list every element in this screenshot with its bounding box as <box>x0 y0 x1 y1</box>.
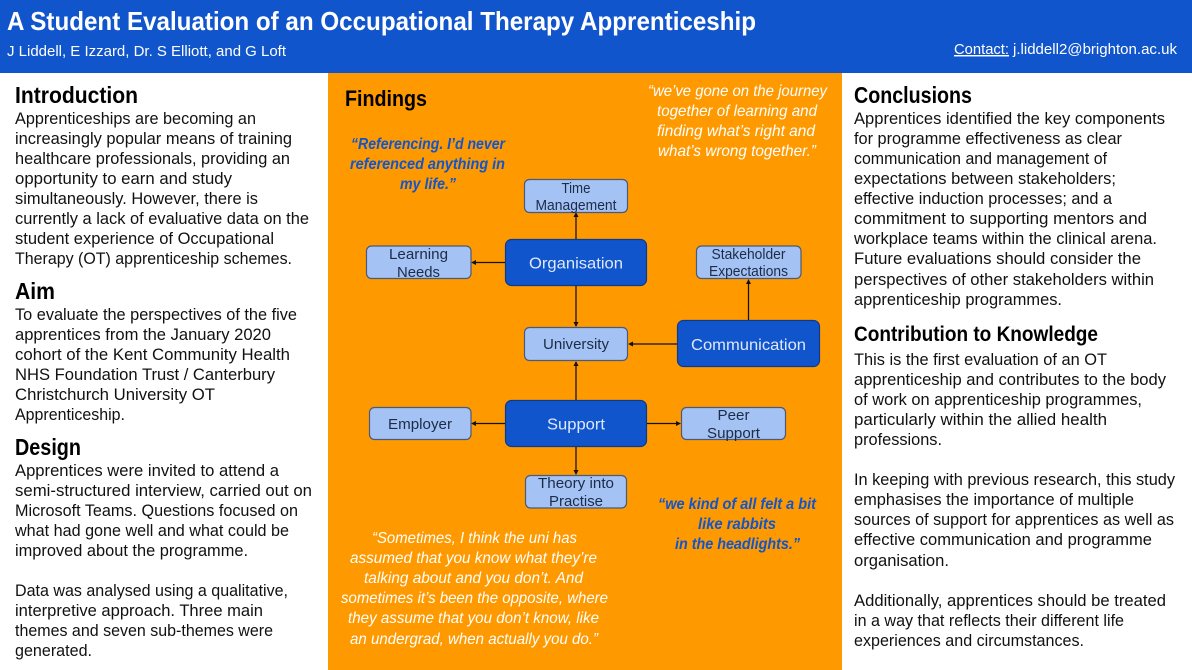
text: introduction: simultaneously. However, there is <box>15 190 258 208</box>
box: theory into practise: Theory into <box>538 476 614 492</box>
quote: rabbits: “we kind of all felt a bit <box>658 496 817 513</box>
text: conclusions: communication and management of <box>854 150 1107 168</box>
box: support: Support <box>547 416 606 434</box>
quote: sometimes: “Sometimes, I think the uni has <box>372 530 577 547</box>
text: introduction <box>15 110 309 268</box>
arrows <box>471 212 751 475</box>
text: contribution: In keeping with previous research, this study <box>854 471 1176 489</box>
text: aim: apprentices from the January 2020 <box>15 326 271 344</box>
quote: journey: finding what’s right and <box>657 123 816 140</box>
text: contribution: in a way that reflects their different life <box>854 612 1124 630</box>
quote: sometimes <box>341 530 608 648</box>
text: design: semi-structured interview, carried out on <box>15 482 312 500</box>
box: stakeholder expectations: Expectations <box>709 264 788 280</box>
quote: sometimes: assumed that you know what they’re <box>350 550 597 567</box>
text: contribution: emphasises the importance of multiple <box>854 491 1134 509</box>
panel: findings <box>341 83 828 648</box>
text: design: generated. <box>15 642 92 660</box>
box: time management: Management <box>536 198 616 214</box>
quote: referencing <box>350 136 506 193</box>
box: learning needs <box>366 246 471 281</box>
box: time management <box>524 180 628 214</box>
box: theory into practise <box>526 476 626 510</box>
text: conclusions: effective induction processes; and a <box>854 190 1113 208</box>
text: introduction: opportunity to earn and study <box>15 170 233 188</box>
text: conclusions: workplace teams within the clinical arena. <box>853 230 1157 248</box>
box: peer support <box>682 408 786 442</box>
text: aim: NHS Foundation Trust / Canterbury <box>15 366 276 384</box>
quote: sometimes: sometimes it’s been the opposite, where <box>341 590 608 607</box>
box: learning needs: Learning <box>389 247 448 263</box>
text: introduction: Therapy (OT) apprenticeship schemes. <box>15 250 292 268</box>
text: contribution: This is the first evaluation of an OT <box>854 351 1107 369</box>
heading: contribution to knowledge: Contribution to Knowledge <box>854 323 1098 346</box>
text: conclusions: perspectives of other stakeholders within <box>854 271 1154 289</box>
box: organisation <box>506 240 646 286</box>
text: contribution: apprenticeship and contributes to the body <box>854 371 1167 389</box>
text: design: Data was analysed using a qualitative, <box>15 582 288 600</box>
text: conclusions: apprenticeship programmes. <box>854 291 1062 309</box>
text: design: Apprentices were invited to attend a <box>15 462 280 480</box>
text: conclusions: for programme effectiveness as clear <box>854 130 1122 148</box>
quote: sometimes: an undergrad, when actually you do.” <box>350 631 599 648</box>
text: introduction: increasingly popular means of training <box>15 130 292 148</box>
quote: rabbits: in the headlights.” <box>675 536 800 553</box>
text: design <box>14 462 312 660</box>
text: contribution <box>854 351 1176 650</box>
text: conclusions: Apprentices identified the key components <box>854 110 1165 128</box>
text: design: Microsoft Teams. Questions focused on <box>15 502 298 520</box>
text: aim: Christchurch University OT <box>15 386 215 404</box>
text: aim <box>15 306 297 424</box>
heading: conclusions: Conclusions <box>854 82 972 108</box>
text: contribution: of work on apprenticeship programmes, <box>854 391 1142 409</box>
heading: introduction: Introduction <box>15 82 138 108</box>
box: organisation: Organisation <box>529 256 623 272</box>
header banner <box>0 0 1192 73</box>
heading: findings: Findings <box>345 86 427 111</box>
quote: journey: “we’ve gone on the journey <box>648 83 828 100</box>
box: communication: Communication <box>691 337 806 354</box>
quote: referencing: my life.” <box>400 176 456 193</box>
box: learning needs: Needs <box>397 265 440 281</box>
quote: referencing: referenced anything in <box>350 156 505 173</box>
quote: rabbits <box>658 496 817 553</box>
text: design: interpretive approach. Three main <box>15 602 263 620</box>
text: contribution: Additionally, apprentices should be treated <box>854 592 1166 610</box>
text: conclusions: expectations between stakeholders; <box>854 170 1116 188</box>
quote: rabbits: like rabbits <box>698 516 776 533</box>
text: conclusions: commitment to supporting mentors and <box>854 210 1147 228</box>
quote: referencing: “Referencing. I’d never <box>351 136 506 153</box>
quote: journey: together of learning and <box>657 103 818 120</box>
text: conclusions <box>853 110 1165 309</box>
box: time management: Time <box>562 181 590 197</box>
text: introduction: student experience of Occupational <box>15 230 274 248</box>
panel: findings background <box>328 73 842 670</box>
quote: journey: what’s wrong together.” <box>658 143 817 160</box>
box: university: University <box>543 337 610 353</box>
text: contribution: sources of support for apprentices as well as <box>854 511 1174 529</box>
text: contribution: organisation. <box>854 552 949 570</box>
text: contribution: experiences and circumstances. <box>854 632 1084 650</box>
box: university <box>524 328 628 360</box>
text: aim: cohort of the Kent Community Health <box>15 346 290 364</box>
contact: Contact: <box>954 42 1009 58</box>
text: design: improved about the programme. <box>15 542 248 560</box>
flow diagram <box>366 180 820 510</box>
text: design: what had gone well and what could be <box>14 522 289 540</box>
box: peer support: Peer <box>718 408 750 424</box>
text: aim: Apprenticeship. <box>15 406 125 424</box>
text: introduction: healthcare professionals, providing an <box>15 150 290 168</box>
panel: left column <box>14 82 312 660</box>
text: conclusions: Future evaluations should consider the <box>854 250 1141 268</box>
box: employer: Employer <box>388 417 452 433</box>
panel: right column <box>853 82 1176 650</box>
heading: design: Design <box>15 434 81 460</box>
text: design: themes and seven sub-themes were <box>15 622 273 640</box>
text: introduction: currently a lack of evaluative data on the <box>15 210 309 228</box>
heading: aim: Aim <box>15 278 55 304</box>
quote: journey <box>648 83 828 160</box>
quote: sometimes: talking about and you don’t. And <box>364 570 584 587</box>
text: contribution: professions. <box>854 431 942 449</box>
title: A Student Evaluation of an Occupational Therapy Apprenticeship <box>7 6 756 36</box>
box: employer <box>370 408 471 440</box>
box: stakeholder expectations <box>696 246 801 280</box>
text: contribution: particularly within the allied health <box>854 411 1107 429</box>
box: peer support: Support <box>707 426 760 442</box>
authors: J Liddell, E Izzard, Dr. S Elliott, and G Loft <box>7 43 287 60</box>
text: introduction: Apprenticeships are becoming an <box>15 110 256 128</box>
text: contribution: effective communication and programme <box>854 531 1152 549</box>
box: theory into practise: Practise <box>549 494 603 510</box>
box: support <box>506 400 646 446</box>
box: communication <box>678 320 820 366</box>
quote: sometimes: they assume that you don’t know, like <box>348 610 599 627</box>
text: aim: To evaluate the perspectives of the five <box>15 306 297 324</box>
contact: j.liddell2@brighton.ac.uk <box>1012 42 1178 58</box>
box: stakeholder expectations: Stakeholder <box>712 247 786 263</box>
